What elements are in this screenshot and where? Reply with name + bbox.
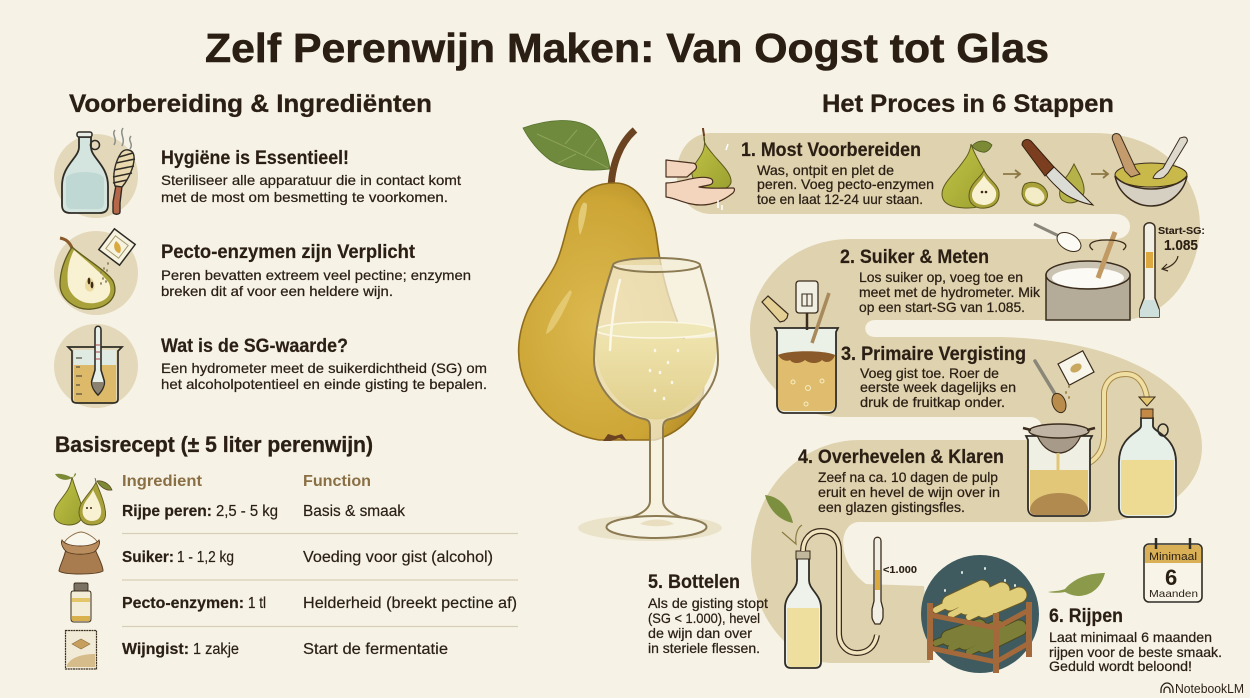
table header: Ingredient bbox=[122, 473, 202, 490]
text: step 6: Laat minimaal 6 maanden bbox=[1049, 630, 1212, 645]
text: step 1: peren. Voeg pecto-enzymen bbox=[757, 177, 934, 192]
icon: siphon and hydrometer bbox=[803, 531, 883, 653]
panel: basisrecept table bbox=[54, 432, 518, 669]
text: step 5: 5. Bottelen bbox=[648, 572, 740, 593]
icon: whole and halved pear bbox=[942, 141, 999, 208]
label: sg under 1.000: <1.000 bbox=[883, 564, 917, 576]
glass bbox=[594, 265, 718, 519]
text: step 6: 6. Rijpen bbox=[1049, 606, 1123, 627]
text: pecto row: Pecto-enzymen: bbox=[122, 595, 244, 612]
text: step 1: toe en laat 12-24 uur staan. bbox=[757, 192, 923, 207]
text: step 3: 3. Primaire Vergisting bbox=[841, 344, 1026, 365]
text: step 6 bbox=[1049, 606, 1222, 674]
text: step 3: eerste week dagelijks en bbox=[860, 380, 1016, 395]
text: suiker row: 1 - 1,2 kg bbox=[177, 549, 234, 566]
panel: voorbereiding en ingredienten bbox=[54, 90, 487, 408]
text: step 1: 1. Most Voorbereiden bbox=[741, 140, 921, 161]
text: sg-waarde: het alcoholpotentieel en einde gisting te bepalen. bbox=[161, 376, 487, 392]
text: step 4: 4. Overhevelen & Klaren bbox=[798, 447, 1004, 468]
icon: small leaf sprig bbox=[765, 495, 802, 544]
icon: calendar: 6 bbox=[1165, 565, 1177, 590]
icon: leaf bbox=[1048, 573, 1105, 596]
leaf bbox=[523, 120, 610, 170]
icon: calendar: Minimaal bbox=[1149, 551, 1197, 563]
icon: airlock and bottle bbox=[762, 281, 818, 330]
icon: jug and brush bbox=[54, 128, 138, 218]
text: step 2: Los suiker op, voeg toe en bbox=[859, 270, 1023, 285]
text: step 6: rijpen voor de beste smaak. bbox=[1049, 645, 1222, 660]
label: start sg bbox=[1158, 225, 1205, 254]
text: step 2 bbox=[840, 247, 1040, 315]
text: step 5: in steriele flessen. bbox=[648, 641, 760, 656]
heading: process: Het Proces in 6 Stappen bbox=[822, 90, 1114, 118]
text: suiker row: Suiker: bbox=[122, 549, 174, 566]
text: rijpe peren row: Rijpe peren: bbox=[122, 503, 212, 520]
step 6: rijpen bbox=[921, 538, 1222, 674]
step 2: suiker en meten bbox=[840, 223, 1205, 320]
title: Zelf Perenwijn Maken: Van Oogst tot Glas bbox=[205, 25, 1049, 71]
text: pecto row: 1 tl bbox=[248, 595, 266, 612]
text: hygiene bbox=[161, 148, 461, 205]
text: pecto-enzymen: breken dit af voor een heldere wijn. bbox=[161, 283, 393, 299]
step 5: bottelen bbox=[648, 531, 917, 668]
text: pecto row: Helderheid (breekt pectine af) bbox=[303, 595, 517, 612]
table header: Function bbox=[303, 473, 371, 490]
text: rijpe peren row: Basis & smaak bbox=[303, 503, 405, 520]
step 4: overhevelen en klaren bbox=[765, 374, 1176, 544]
text: hygiene: met de most om besmetting te voorkomen. bbox=[161, 189, 448, 205]
text: wijngist row bbox=[122, 641, 448, 658]
text: step 4: eruit en hevel de wijn over in bbox=[818, 485, 1000, 500]
icon: hands with pear bbox=[666, 128, 734, 210]
icon: enzyme bottle bbox=[71, 583, 91, 622]
panel: process ribbon bbox=[648, 90, 1222, 674]
text: pecto-enzymen: Pecto-enzymen zijn Verplicht bbox=[161, 242, 416, 263]
icon: sugar spoon bbox=[1034, 224, 1084, 255]
text: wijngist row: Start de fermentatie bbox=[303, 641, 448, 658]
text: pecto-enzymen: Peren bevatten extreem veel pectine; enzymen bbox=[161, 267, 471, 283]
text: sg-waarde: Een hydrometer meet de suikerdichtheid (SG) om bbox=[161, 360, 487, 376]
icon: knife and cut pear bbox=[1022, 140, 1093, 206]
text: step 5 bbox=[648, 572, 768, 656]
text: step 4: Zeef na ca. 10 dagen de pulp bbox=[818, 470, 998, 485]
arrow: pear to knife bbox=[1003, 170, 1020, 178]
text: step 5: (SG < 1.000), hevel bbox=[648, 611, 760, 626]
text: step 4: een glazen gistingsfles. bbox=[818, 500, 965, 515]
text: step 5: de wijn dan over bbox=[648, 626, 752, 641]
text: step 2: 2. Suiker & Meten bbox=[840, 247, 989, 268]
icon: glass jug bbox=[1119, 409, 1176, 517]
logo: notebooklm: NotebookLM bbox=[1175, 682, 1244, 696]
text: pecto row bbox=[122, 595, 517, 612]
text: step 1 bbox=[741, 140, 934, 207]
arrow: to hydrometer bbox=[1162, 256, 1178, 271]
text: hygiene: Steriliseer alle apparatuur die in contact komt bbox=[161, 172, 461, 188]
icon: yeast sachet bbox=[66, 630, 96, 669]
icon: hydrometer in beaker bbox=[54, 324, 138, 408]
heading: basisrecept: Basisrecept (± 5 liter perenwijn) bbox=[55, 432, 373, 457]
icon: siphon tube with arrow bbox=[1089, 374, 1155, 463]
icon: bottle bbox=[785, 551, 821, 668]
step 1: most voorbereiden bbox=[666, 128, 1187, 210]
text: step 3: Voeg gist toe. Roer de bbox=[860, 366, 999, 381]
icon: calendar: Maanden bbox=[1149, 588, 1198, 600]
icon: halved pear with sachet bbox=[54, 229, 138, 315]
stem bbox=[611, 130, 635, 192]
icon: hydrometer bbox=[1140, 223, 1159, 317]
text: sg-waarde: Wat is de SG-waarde? bbox=[161, 336, 348, 357]
text: rijpe peren row bbox=[122, 503, 405, 520]
text: pecto-enzymen bbox=[161, 242, 471, 299]
text: suiker row bbox=[122, 549, 493, 566]
ribbon path bbox=[677, 133, 1202, 663]
icon: pears bbox=[54, 473, 112, 525]
text: wijngist row: 1 zakje bbox=[193, 641, 239, 658]
text: step 3: druk de fruitkap onder. bbox=[860, 395, 1005, 410]
icon: wine rack bbox=[921, 555, 1039, 673]
text: step 3 bbox=[841, 344, 1026, 410]
table header bbox=[122, 473, 371, 490]
icon: sugar sack bbox=[59, 532, 103, 574]
step 3: primaire vergisting bbox=[762, 281, 1094, 415]
text: step 2: meet met de hydrometer. Mik bbox=[859, 285, 1040, 300]
text: step 2: op een start-SG van 1.085. bbox=[859, 300, 1025, 315]
glass shadow bbox=[578, 515, 722, 541]
text: step 5: Als de gisting stopt bbox=[648, 596, 768, 611]
text: step 4 bbox=[798, 447, 1004, 515]
text: rijpe peren row: 2,5 - 5 kg bbox=[216, 503, 278, 520]
text: step 6: Geduld wordt beloond! bbox=[1049, 659, 1192, 674]
icon: pot with stick bbox=[1046, 232, 1130, 320]
text: suiker row: Voeding voor gist (alcohol) bbox=[303, 549, 493, 566]
pear body bbox=[519, 183, 704, 440]
text: hygiene: Hygiëne is Essentieel! bbox=[161, 148, 349, 169]
icon: fermenting beaker bbox=[775, 293, 838, 413]
icon: calendar bbox=[1144, 538, 1202, 602]
illustration: pear and wine glass bbox=[519, 120, 722, 541]
arrow: knife to bowl bbox=[1091, 170, 1108, 178]
label: start sg: 1.085 bbox=[1164, 238, 1198, 254]
label: start sg: Start-SG: bbox=[1158, 225, 1205, 237]
icon: beaker with sieve bbox=[1023, 424, 1095, 516]
heading: voorbereiding: Voorbereiding & Ingrediënten bbox=[69, 90, 432, 118]
icon: bowl with spoons bbox=[1112, 134, 1187, 206]
text: wijngist row: Wijngist: bbox=[122, 641, 189, 658]
text: sg-waarde bbox=[161, 336, 487, 392]
icon: spoon and yeast sachet bbox=[1035, 351, 1094, 415]
text: step 1: Was, ontpit en plet de bbox=[757, 163, 894, 178]
